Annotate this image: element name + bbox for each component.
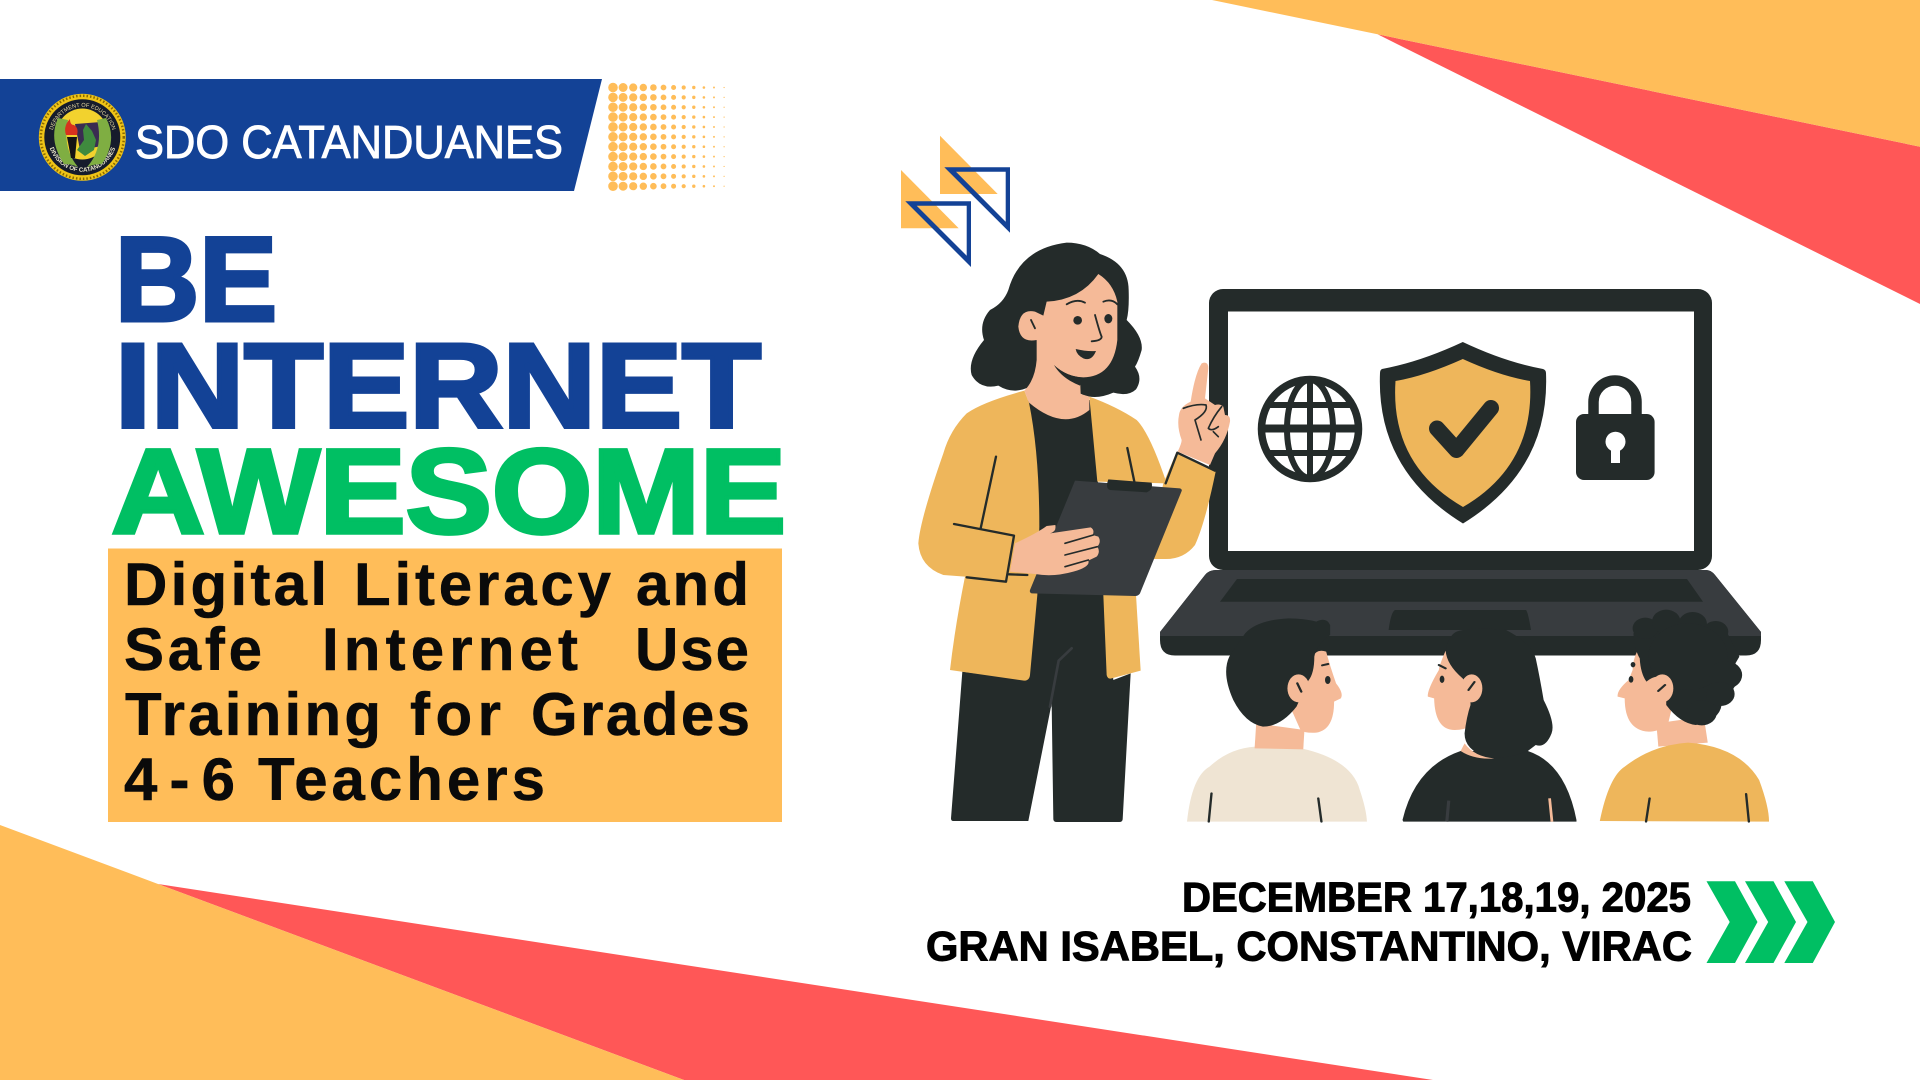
banner label: SDO CATANDUANES <box>135 116 563 168</box>
header banner <box>0 79 602 191</box>
title: AWESOME <box>112 425 786 559</box>
illustration: laptop <box>1160 289 1761 656</box>
title: INTERNET <box>115 319 761 453</box>
icon: division seal <box>38 94 126 181</box>
teacher hair <box>971 243 1142 397</box>
subtitle text: Literacy <box>354 551 612 618</box>
illustration: teacher <box>918 243 1230 822</box>
date and venue: DECEMBER 17,18,19, 2025 <box>1182 874 1691 920</box>
subtitle text: Internet <box>322 616 578 683</box>
subtitle text: Digital <box>124 551 327 618</box>
title: BE <box>115 213 277 347</box>
icon: globe <box>1262 380 1358 478</box>
subtitle text: Grades <box>531 681 750 748</box>
icon: division seal: DIVISION OF CATANDUANES <box>50 146 115 172</box>
subtitle text: Use <box>635 616 749 683</box>
teacher pointing hand <box>1178 363 1230 465</box>
subtitle text: for <box>410 681 501 748</box>
subtitle text: Training <box>125 681 381 748</box>
clipboard <box>1030 479 1182 596</box>
teacher body <box>918 391 1216 822</box>
teacher left hand <box>1010 525 1100 575</box>
date and venue: GRAN ISABEL, CONSTANTINO, VIRAC <box>926 922 1692 970</box>
title <box>112 213 786 559</box>
illustration: student two <box>1402 629 1576 822</box>
bottom left corner shapes <box>0 825 1433 1080</box>
halftone dots <box>613 88 724 189</box>
date and venue <box>926 874 1692 970</box>
icon: padlock <box>1576 380 1655 480</box>
subtitle text: Teachers <box>258 746 545 813</box>
illustration: student one <box>1187 618 1367 822</box>
subtitle text: and <box>636 551 749 618</box>
subtitle text <box>124 551 750 813</box>
teacher face <box>1018 274 1230 465</box>
subtitle text: 4-6 <box>124 746 235 813</box>
icon: shield with check <box>1380 342 1546 524</box>
subtitle box <box>108 548 782 822</box>
icon: chevrons <box>1706 881 1835 963</box>
illustration: student three <box>1600 610 1769 822</box>
subtitle text: Safe <box>124 616 262 683</box>
decorative triangles <box>901 136 1010 267</box>
icon: division seal: DEPARTMENT OF EDUCATION <box>49 102 116 130</box>
top right corner shapes <box>1212 0 1920 304</box>
